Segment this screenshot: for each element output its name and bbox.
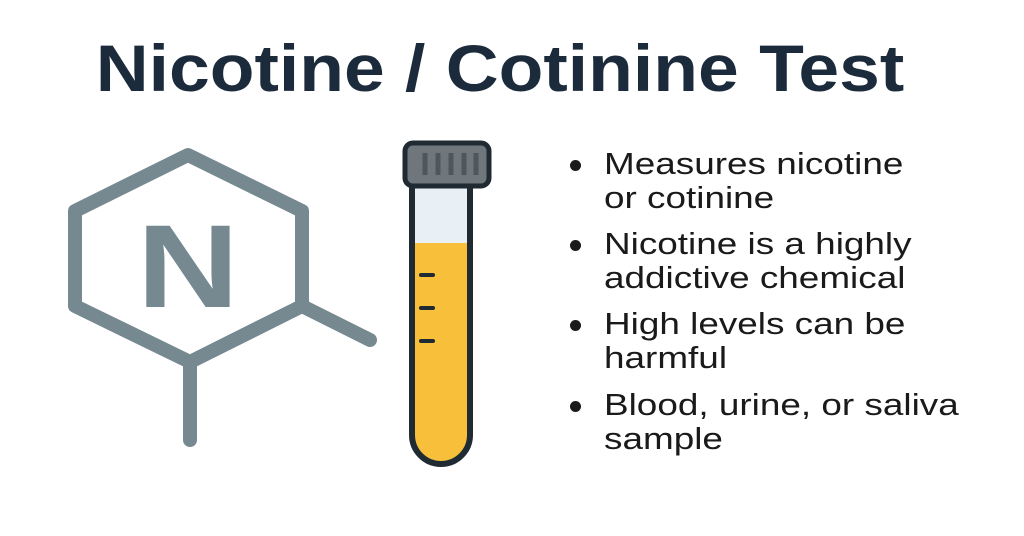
icon: nicotine molecule: N xyxy=(137,200,239,332)
icon: nicotine molecule xyxy=(68,148,377,447)
bullet 2: addictive chemical xyxy=(604,260,905,295)
bullet 4 xyxy=(570,387,959,456)
bullet 3 xyxy=(570,306,905,375)
bullet 1 xyxy=(570,146,903,215)
bullet 2: Nicotine is a highly xyxy=(604,226,912,261)
bullet 3: harmful xyxy=(604,340,727,375)
bullet 2 xyxy=(570,226,912,295)
bullet 1: or cotinine xyxy=(604,180,774,215)
bullet 1: Measures nicotine xyxy=(604,146,903,181)
icon: test tube xyxy=(402,140,492,467)
bullet 4: Blood, urine, or saliva xyxy=(604,387,959,422)
bullet 3: High levels can be xyxy=(604,306,905,341)
title: Nicotine / Cotinine Test xyxy=(96,31,904,105)
bullet 4: sample xyxy=(604,421,723,456)
